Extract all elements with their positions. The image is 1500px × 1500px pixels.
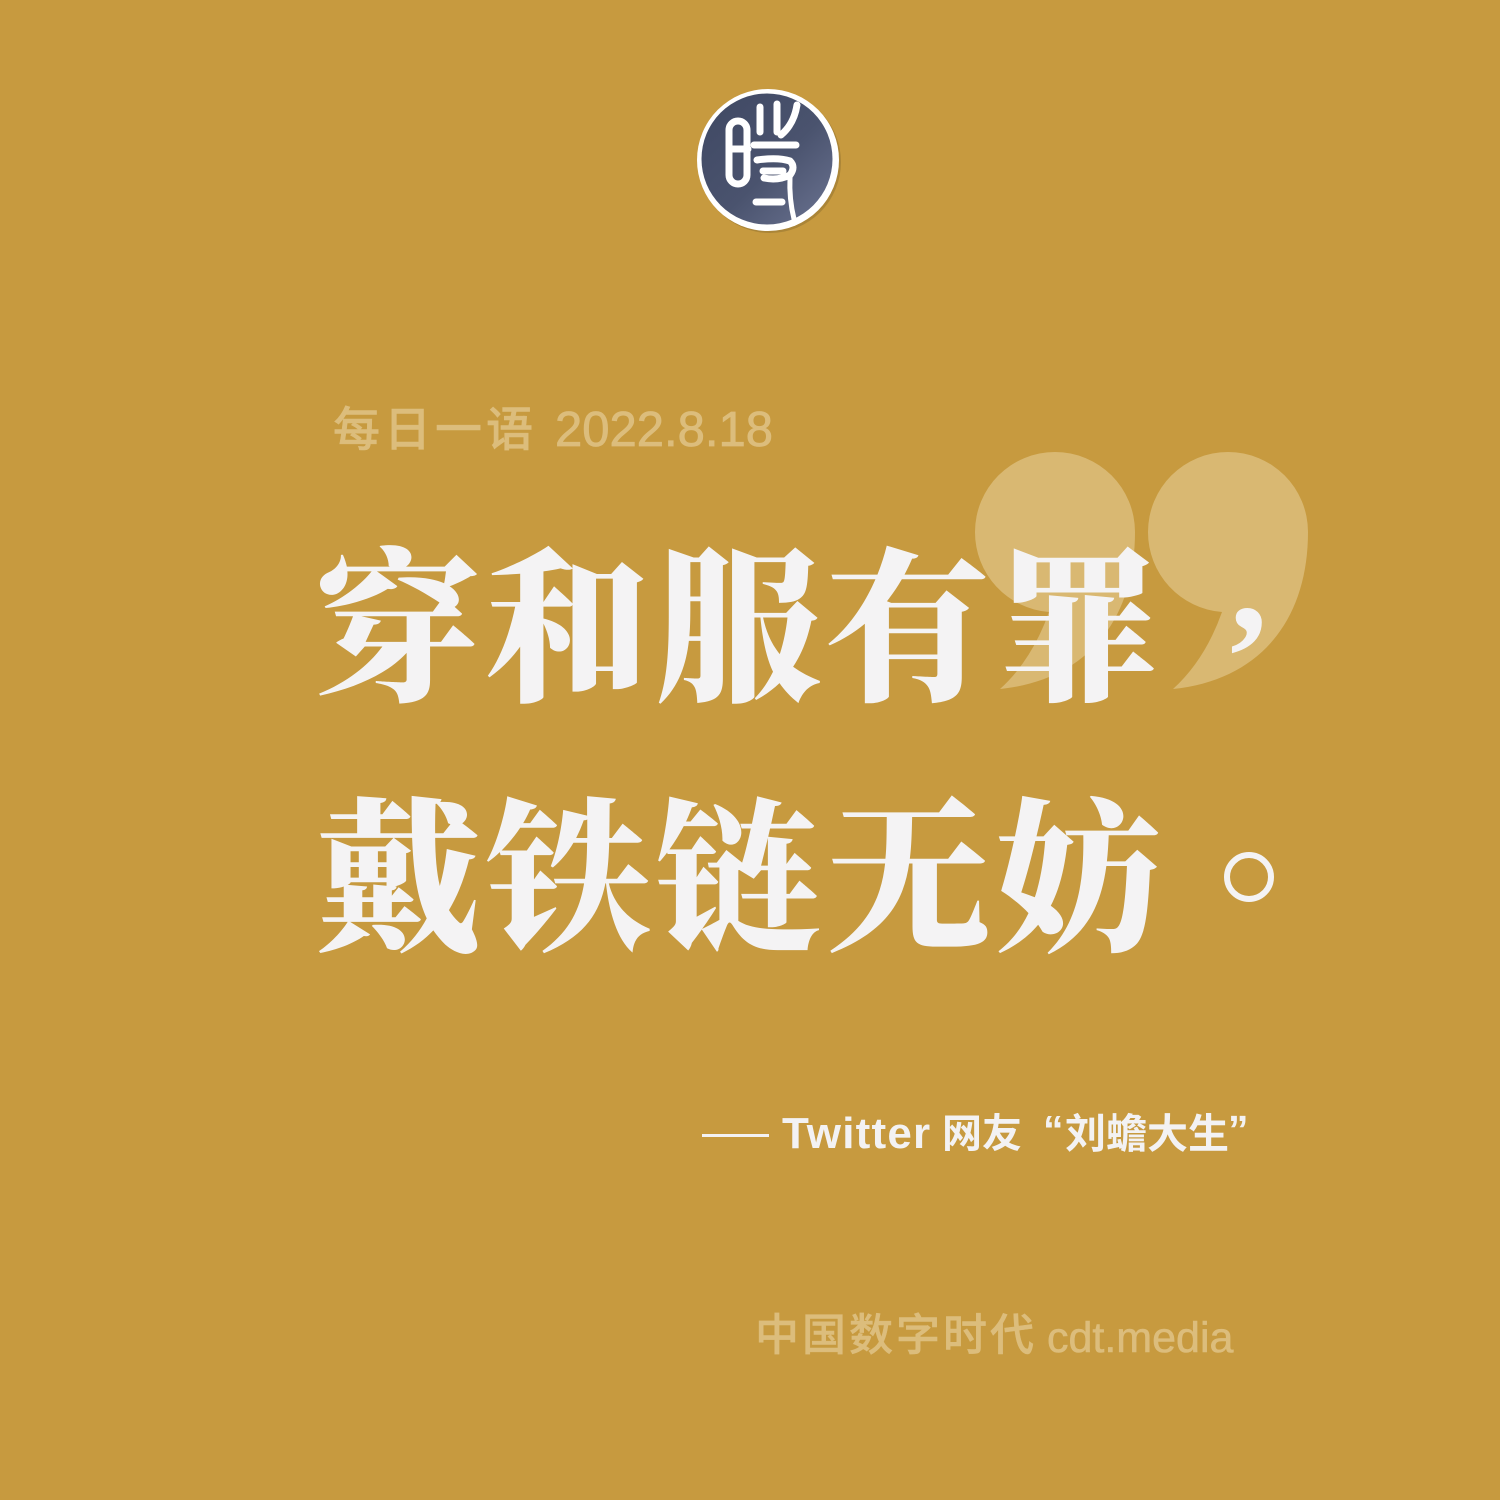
source footer: cdt.media bbox=[1047, 1314, 1233, 1362]
attribution: Twitter bbox=[782, 1109, 931, 1158]
icon: circular seal logo bbox=[697, 89, 841, 233]
date heading: 2022.8.18 bbox=[555, 403, 773, 457]
date heading: 每日一语 bbox=[333, 403, 537, 456]
attribution bbox=[702, 1107, 1248, 1158]
source footer bbox=[755, 1311, 1234, 1362]
source footer: 中国数字时代 bbox=[755, 1311, 1037, 1360]
main quote: second line: 戴铁链无妨 bbox=[315, 790, 1165, 974]
main quote: full stop bbox=[1224, 852, 1274, 902]
date heading bbox=[333, 403, 773, 457]
attribution: ” bbox=[1228, 1107, 1248, 1153]
main quote: first line: 穿和服有罪 bbox=[315, 540, 1165, 724]
attribution: “ bbox=[1043, 1107, 1064, 1153]
attribution: 网友 bbox=[942, 1112, 1022, 1156]
main quote: comma: , bbox=[1230, 497, 1272, 663]
attribution: 刘蟾大生 bbox=[1065, 1111, 1229, 1157]
